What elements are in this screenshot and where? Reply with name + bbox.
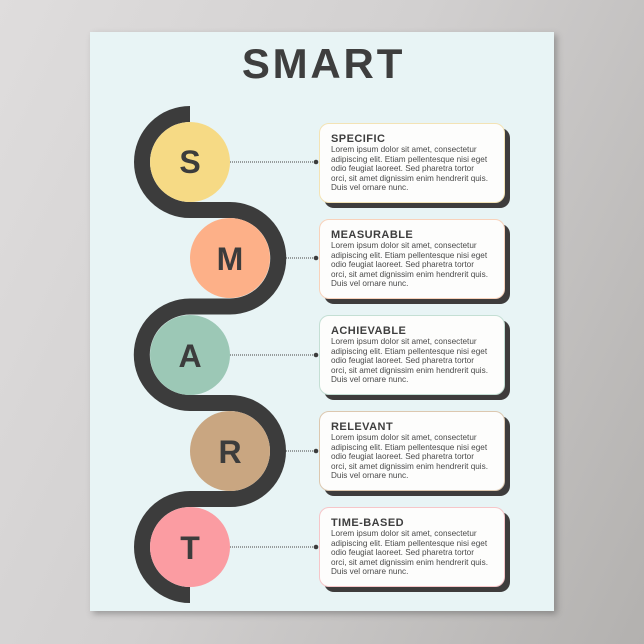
connector: M (286, 256, 318, 260)
card: specific (319, 123, 510, 208)
circle: S: S (179, 144, 201, 180)
card: specific: Duis vel ornare nunc. (331, 183, 408, 192)
card: specific: adipiscing elit. Etiam pellentesque nisi eget (331, 154, 487, 164)
circle: T: T (180, 530, 200, 566)
poster sheet (90, 32, 554, 611)
card: measurable: Duis vel ornare nunc. (331, 279, 408, 288)
card: time-based: adipiscing elit. Etiam pellentesque nisi eget (331, 538, 487, 548)
card: achievable: Lorem ipsum dolor sit amet, consectetur (331, 337, 477, 346)
card: time-based: Lorem ipsum dolor sit amet, consectetur (331, 529, 477, 538)
card: achievable: ACHIEVABLE (331, 325, 406, 337)
card: time-based (319, 507, 510, 592)
card: specific: orci, sit amet dignissim enim hendrerit quis. (331, 174, 488, 182)
card: achievable: orci, sit amet dignissim enim hendrerit quis. (331, 366, 488, 374)
card: relevant: adipiscing elit. Etiam pellentesque nisi eget (331, 442, 487, 452)
circle: R (190, 411, 270, 491)
card: measurable (319, 219, 510, 304)
card: relevant: RELEVANT (331, 421, 393, 433)
card: achievable: adipiscing elit. Etiam pellentesque nisi eget (331, 346, 487, 356)
card: time-based: odio feugiat laoreet. Sed pharetra tortor (331, 548, 474, 557)
card: measurable: Lorem ipsum dolor sit amet, consectetur (331, 241, 477, 250)
card: relevant: Duis vel ornare nunc. (331, 471, 408, 480)
card: measurable: orci, sit amet dignissim enim hendrerit quis. (331, 270, 488, 278)
card: time-based: orci, sit amet dignissim enim hendrerit quis. (331, 558, 488, 566)
circle: A: A (178, 338, 202, 374)
connector: R (286, 449, 318, 453)
circle: M (190, 218, 270, 298)
connector: T (230, 545, 318, 549)
card: time-based: Duis vel ornare nunc. (331, 567, 408, 576)
card: relevant: orci, sit amet dignissim enim hendrerit quis. (331, 462, 488, 470)
circle: R: R (218, 434, 242, 470)
circle: S (150, 122, 230, 202)
card: relevant: odio feugiat laoreet. Sed pharetra tortor (331, 452, 474, 461)
card: measurable: odio feugiat laoreet. Sed pharetra tortor (331, 260, 474, 269)
card: achievable: Duis vel ornare nunc. (331, 375, 408, 384)
card: achievable: odio feugiat laoreet. Sed pharetra tortor (331, 356, 474, 365)
title: SMART (242, 40, 405, 87)
card: achievable (319, 315, 510, 400)
card: time-based: TIME-BASED (331, 517, 404, 529)
card: specific: Lorem ipsum dolor sit amet, consectetur (331, 145, 477, 154)
circle: A (150, 315, 230, 395)
card: specific: SPECIFIC (331, 133, 385, 145)
card: measurable: MEASURABLE (331, 229, 413, 241)
circle: T (150, 507, 230, 587)
serpentine ribbon (142, 114, 278, 595)
card: measurable: adipiscing elit. Etiam pellentesque nisi eget (331, 250, 487, 260)
circle: M: M (217, 241, 243, 277)
card: relevant (319, 411, 510, 496)
connector: A (230, 353, 318, 357)
card: relevant: Lorem ipsum dolor sit amet, consectetur (331, 433, 477, 442)
card: specific: odio feugiat laoreet. Sed pharetra tortor (331, 164, 474, 173)
connector: S (230, 160, 318, 164)
